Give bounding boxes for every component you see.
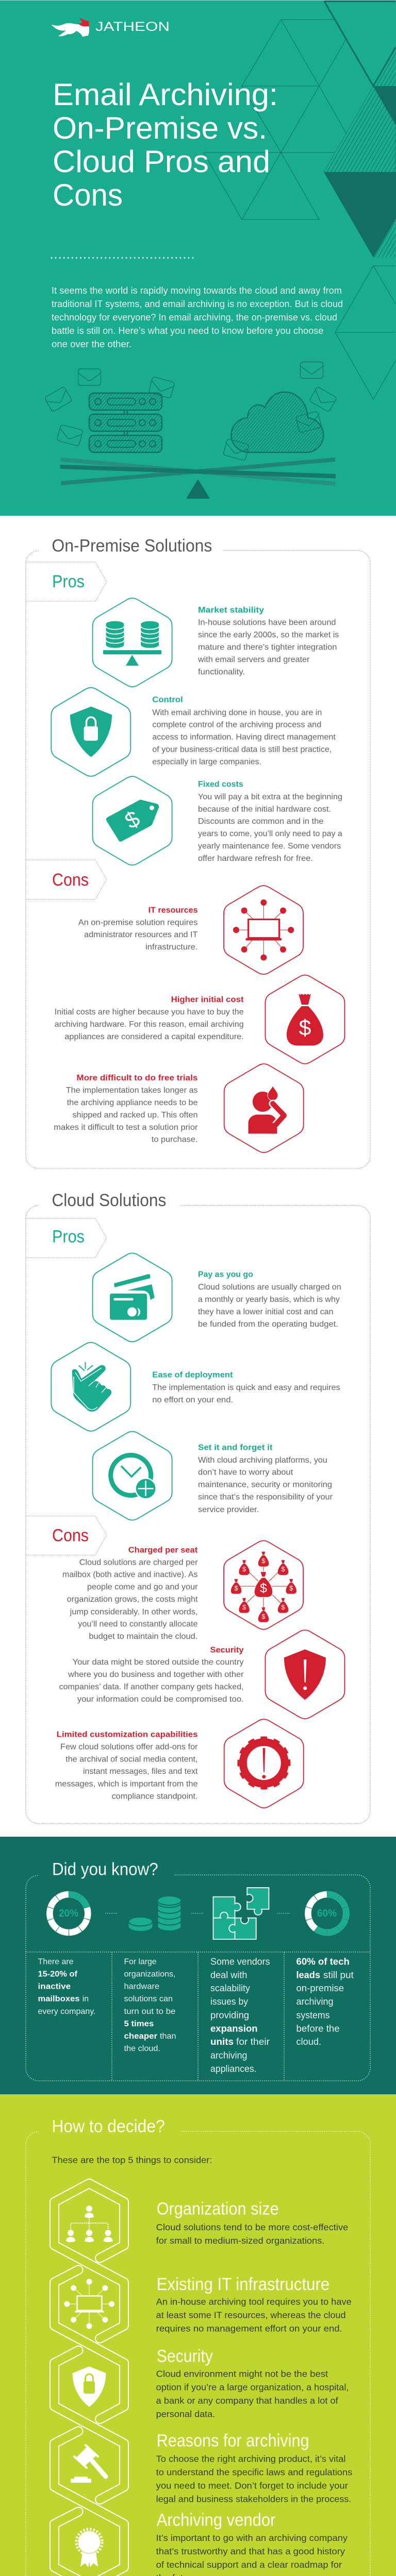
- tag: pros: Pros: [52, 572, 85, 591]
- text: you’ll need to constantly allocate: [78, 1620, 198, 1629]
- logo: [51, 18, 170, 37]
- icon: money bag network: $: [234, 1584, 238, 1592]
- text: [197, 606, 339, 676]
- text: a monthly or yearly basis, which is why: [198, 1295, 340, 1304]
- text: [198, 1444, 333, 1514]
- fact: expansion units: scalability: [210, 1982, 251, 1993]
- text: [78, 906, 198, 952]
- fact: expansion units: Some vendors: [210, 1956, 270, 1967]
- text: with email servers and greater: [197, 655, 310, 664]
- chart: 60% donut: 60%: [317, 1908, 337, 1919]
- con: higher initial cost: [55, 975, 344, 1064]
- text: Your data might be stored outside the country: [73, 1658, 244, 1667]
- text: Higher initial cost: [171, 995, 244, 1004]
- icon: fox: [51, 18, 89, 37]
- text: [156, 2431, 353, 2504]
- text: to purchase.: [152, 1136, 198, 1144]
- pro: pay as you go: [93, 1253, 341, 1342]
- fact: hardware cost: turn out to be: [124, 2007, 176, 2016]
- text: infrastructure.: [145, 943, 198, 952]
- text: your information could be compromised too.: [77, 1695, 244, 1704]
- text: be funded from the operating budget.: [198, 1320, 338, 1329]
- text: Security: [157, 2346, 213, 2366]
- text: [156, 2275, 352, 2334]
- icon: money bag network: $: [289, 1584, 293, 1592]
- text: functionality.: [198, 668, 245, 676]
- text: instant messages, files and text: [83, 1767, 198, 1776]
- text: [55, 1730, 198, 1801]
- text: mailbox (both active and inactive). As: [62, 1570, 198, 1579]
- text: the archiving appliance needs to be: [67, 1098, 198, 1107]
- text: at least some IT resources, whereas the cloud: [156, 2310, 345, 2320]
- text: requires no management effort on your end.: [156, 2324, 342, 2334]
- fact: inactive mailboxes: in: [82, 1994, 89, 2003]
- pro: set it and forget it: [93, 1431, 333, 1520]
- fact: tech leads: cloud.: [296, 2036, 321, 2047]
- icons: envelopes: [44, 362, 337, 461]
- fact: inactive mailboxes: [38, 1958, 96, 2016]
- icon: laptop network: [64, 2279, 114, 2329]
- fact: tech leads: archiving: [296, 1996, 333, 2007]
- fact: expansion units: for their: [236, 2036, 270, 2047]
- fact: hardware cost: For large: [124, 1958, 157, 1966]
- illustration: balance scale: [60, 457, 336, 499]
- fact: expansion units: issues by: [210, 1996, 249, 2007]
- text: don’t have to worry about: [198, 1468, 293, 1477]
- text: Fixed costs: [198, 780, 243, 789]
- intro line: These are the top 5 things to consider:: [52, 2155, 212, 2165]
- heading: Cloud Solutions: [52, 1191, 166, 1210]
- icon: money bag network: $: [260, 1581, 267, 1596]
- text: option if you’re a large organization, a hospital,: [156, 2382, 349, 2393]
- text: the archival of social media content,: [65, 1755, 198, 1764]
- text: legal and business stakeholders in the process.: [156, 2494, 351, 2504]
- background triangles: [204, 1, 396, 399]
- panel: did you know: [0, 1837, 396, 2094]
- title: [53, 77, 278, 212]
- text: To choose the right archiving product, it’s vital: [156, 2453, 345, 2464]
- icon: warning shield: [265, 1630, 344, 1719]
- text: shipped and racked up. This often: [73, 1111, 198, 1120]
- text: they have a lower initial cost and can: [198, 1308, 333, 1316]
- text: administrator resources and IT: [84, 930, 198, 939]
- text: Few cloud solutions offer add-ons for: [60, 1742, 198, 1752]
- fact: tech leads: still put: [323, 1969, 354, 1980]
- icon: person with sweat drop: [224, 1064, 304, 1153]
- heading: Did you know?: [52, 1859, 158, 1879]
- text: Charged per seat: [128, 1546, 198, 1554]
- con: limited customization capabilities: [55, 1719, 304, 1808]
- intro text: battle is still on. Here’s what you need to know before you choose: [52, 325, 324, 336]
- chart: 20% donut: [50, 1894, 88, 1933]
- text: Cloud solutions are charged per: [79, 1558, 198, 1567]
- text: [152, 1371, 340, 1404]
- text: jump considerably. In other words,: [70, 1607, 198, 1617]
- text: mature and there’s tighter integration: [198, 643, 337, 652]
- text: With cloud archiving platforms, you: [198, 1456, 327, 1465]
- fact: hardware cost: hardware: [124, 1982, 159, 1991]
- icon: clock plus: [93, 1431, 172, 1520]
- text: maintenance, security or monitoring: [198, 1481, 332, 1489]
- text: where you do business and together with other: [68, 1670, 244, 1679]
- icon: award medal: [76, 2529, 102, 2567]
- fact: tech leads: 60% of tech: [296, 1956, 350, 1967]
- fact: tech leads: on-premise: [296, 1982, 344, 1993]
- tag: cons: Cons: [52, 1526, 89, 1545]
- panel: hero: [0, 0, 396, 516]
- icon: money bag: $: [299, 1015, 311, 1040]
- text: More difficult to do free trials: [76, 1074, 197, 1082]
- icon: money bag network: $: [261, 1557, 266, 1565]
- text: you need to meet. Don’t forget to include your: [156, 2480, 348, 2490]
- text: offer hardware refresh for free.: [198, 854, 313, 863]
- text: With email archiving done in house, you are in: [152, 708, 322, 717]
- fact: hardware cost: than: [160, 2032, 176, 2041]
- chart: 20% donut: 20%: [59, 1908, 78, 1919]
- title: Cloud Pros and: [53, 144, 270, 179]
- fact: tech leads: before the: [296, 2023, 340, 2033]
- text: Control: [152, 696, 183, 704]
- pro: control: [51, 688, 336, 776]
- fact: hardware cost: the cloud.: [124, 2044, 160, 2053]
- text: since the early 2000s, so the market is: [198, 631, 339, 639]
- fact: hardware cost: cheaper: [124, 2032, 157, 2041]
- pro: ease of deployment: [51, 1343, 340, 1431]
- wordmark: JATHEON: [95, 20, 170, 34]
- text: [54, 1074, 198, 1144]
- icon: snapping hand: [51, 1343, 130, 1431]
- heading: How to decide?: [52, 2116, 165, 2136]
- text: because of the initial hardware cost.: [198, 805, 331, 814]
- intro text: traditional IT systems, and email archiving is no exception. But is cloud: [52, 298, 343, 309]
- text: [198, 1270, 341, 1329]
- hexagon chain: [55, 2183, 124, 2576]
- icon: gavel: [71, 2445, 106, 2483]
- text: makes it difficult to test a solution prior: [54, 1123, 198, 1132]
- text: Pay as you go: [198, 1270, 253, 1279]
- text: yearly maintenance fee. Some vendors: [198, 842, 341, 851]
- text: An in-house archiving tool requires you to have: [156, 2297, 352, 2307]
- fact: expansion units: expansion: [210, 2023, 258, 2033]
- text: [62, 1546, 198, 1641]
- text: of technical support and a clear roadmap for: [156, 2560, 342, 2570]
- fact: expansion units: archiving: [210, 2049, 248, 2061]
- tag: cons: Cons: [52, 870, 89, 890]
- icon: money bag: [265, 975, 344, 1064]
- text: since that’s the responsibility of your: [198, 1493, 333, 1502]
- text: Cloud solutions tend to be more cost-effective: [156, 2222, 348, 2232]
- item: organization size: [66, 2199, 348, 2246]
- pro: fixed costs: [93, 776, 342, 865]
- intro text: It seems the world is rapidly moving towards the cloud and away from: [52, 285, 342, 296]
- fact: inactive mailboxes: 15-20% of: [38, 1970, 78, 1979]
- intro text: one over the other.: [52, 338, 131, 349]
- fact: tech leads: leads: [296, 1969, 320, 1980]
- text: a bank or any company that handles a lot of: [156, 2396, 338, 2406]
- item: security: [73, 2346, 349, 2419]
- text: organization grows, the costs might: [67, 1595, 198, 1604]
- text: companies’ data. If another company gets hacked,: [59, 1683, 244, 1691]
- tag: cons: [26, 860, 107, 900]
- icon: price tag: $: [121, 806, 144, 834]
- fact: hardware cost: solutions can: [124, 1994, 173, 2003]
- text: Cloud solutions are usually charged on: [198, 1283, 341, 1292]
- text: It’s important to go with an archiving company: [156, 2533, 348, 2543]
- text: Initial costs are higher because you have to buy the: [55, 1008, 244, 1016]
- fact: expansion units: [210, 1956, 270, 2074]
- text: An on-premise solution requires: [78, 918, 198, 927]
- icon: money bag network: $: [261, 1613, 266, 1620]
- text: [59, 1646, 244, 1704]
- con: charged per seat: [62, 1540, 303, 1641]
- icon: price tag: [93, 776, 172, 865]
- fact: expansion units: deal with: [210, 1969, 248, 1980]
- text: You will pay a bit extra at the beginning: [198, 792, 342, 802]
- con: security: [59, 1630, 344, 1719]
- text: The implementation takes longer as: [66, 1086, 198, 1095]
- panel: on-premise solutions: [26, 536, 370, 1168]
- tag: pros: [26, 562, 107, 601]
- text: The implementation is quick and easy and requires: [152, 1383, 340, 1392]
- text: Cloud environment might not be the best: [156, 2369, 328, 2379]
- text: years to come, you’ll only need to pay a: [198, 829, 342, 838]
- text: compliance standpoint.: [111, 1792, 198, 1801]
- fact: expansion units: appliances.: [210, 2063, 257, 2074]
- icon: org chart: [66, 2206, 113, 2242]
- fact: hardware cost: organizations,: [124, 1970, 175, 1979]
- fact: inactive mailboxes: mailboxes: [38, 1994, 80, 2003]
- icon: money bag network: $: [281, 1603, 285, 1611]
- text: [152, 696, 336, 767]
- text: archiving hardware. For this reason, email archiving: [55, 1020, 244, 1029]
- item: reasons for archiving: [71, 2431, 353, 2504]
- icon: money bag network: [224, 1540, 303, 1629]
- tag: pros: Pros: [52, 1227, 85, 1247]
- fact: hardware cost: [124, 1958, 176, 2053]
- text: [156, 2510, 348, 2576]
- text: people come and go and your: [87, 1583, 198, 1591]
- item: archiving vendor: [76, 2510, 348, 2576]
- text: access to information. Having direct management: [152, 733, 336, 742]
- text: Archiving vendor: [157, 2510, 275, 2530]
- pro: market stability: [93, 598, 339, 687]
- con: it resources: [78, 886, 303, 974]
- tag: pros: [26, 1218, 107, 1258]
- panel: how to decide: [0, 2094, 396, 2576]
- icon: money bag network: $: [242, 1603, 246, 1611]
- text: Limited customization capabilities: [57, 1730, 198, 1739]
- text: [156, 2346, 349, 2419]
- text: appliances are considered a capital expenditure.: [64, 1032, 244, 1041]
- icon: shield lock: [73, 2366, 106, 2407]
- fact: tech leads: [296, 1956, 354, 2047]
- text: no effort on your end.: [152, 1396, 233, 1404]
- heading: On-Premise Solutions: [52, 536, 212, 555]
- fact: hardware cost: 5 times: [124, 2020, 154, 2028]
- intro text: [52, 285, 343, 349]
- fact: tech leads: systems: [296, 2009, 330, 2020]
- chart: 60% donut: [308, 1894, 346, 1933]
- fact: inactive mailboxes: There are: [38, 1958, 74, 1966]
- tag: cons: [26, 1516, 107, 1555]
- icon: laptop network: [224, 886, 303, 974]
- icon: warning gear: [224, 1719, 304, 1808]
- text: service provider.: [198, 1505, 259, 1514]
- text: personal data.: [156, 2409, 215, 2419]
- fact: inactive mailboxes: every company.: [38, 2007, 96, 2016]
- intro text: technology for everyone? In email archiving, the on-premise vs. cloud: [52, 312, 337, 323]
- text: to understand the specific laws and regulations: [156, 2467, 353, 2477]
- text: [156, 2199, 348, 2246]
- illustration: cloud: [231, 392, 323, 452]
- icon: balance: [93, 598, 172, 687]
- title: On-Premise vs.: [53, 111, 267, 145]
- text: IT resources: [148, 906, 198, 914]
- fact: expansion units: units: [210, 2036, 234, 2047]
- icon: money bag network: $: [242, 1565, 246, 1573]
- item: existing it infrastructure: [64, 2275, 352, 2334]
- panel: cloud solutions: [26, 1191, 370, 1824]
- text: In-house solutions have been around: [198, 618, 336, 627]
- text: [198, 780, 342, 863]
- text: complete control of the archiving process and: [152, 721, 321, 730]
- icon: coin stacks: [129, 1896, 181, 1931]
- text: messages, which is important from the: [55, 1780, 198, 1788]
- fact: expansion units: providing: [210, 2009, 249, 2020]
- icon: money bag network: $: [281, 1565, 285, 1573]
- text: Security: [210, 1646, 244, 1655]
- text: of your business-critical data is still best practice,: [152, 745, 332, 754]
- icon: shield lock: [51, 688, 130, 776]
- title: Cons: [53, 178, 123, 212]
- con: more difficult to do free trials: [54, 1064, 304, 1153]
- text: Set it and forget it: [198, 1444, 273, 1452]
- text: for small to medium-sized organizations.: [156, 2235, 324, 2246]
- icon: puzzle: [213, 1888, 269, 1939]
- illustration: server racks: [89, 393, 162, 452]
- text: that’s trustworthy and that has a good history: [156, 2546, 345, 2556]
- text: Organization size: [157, 2199, 279, 2219]
- text: Ease of deployment: [152, 1371, 233, 1380]
- text: Market stability: [198, 606, 264, 615]
- text: Existing IT infrastructure: [157, 2275, 329, 2294]
- text: Reasons for archiving: [157, 2431, 309, 2450]
- fact: inactive mailboxes: inactive: [38, 1982, 71, 1991]
- icon: credit cards: [93, 1253, 172, 1342]
- text: especially in large companies.: [152, 758, 261, 767]
- text: Discounts are common and in the: [198, 817, 324, 826]
- title: Email Archiving:: [53, 77, 278, 112]
- text: budget to maintain the cloud.: [89, 1632, 197, 1641]
- text: [55, 995, 244, 1041]
